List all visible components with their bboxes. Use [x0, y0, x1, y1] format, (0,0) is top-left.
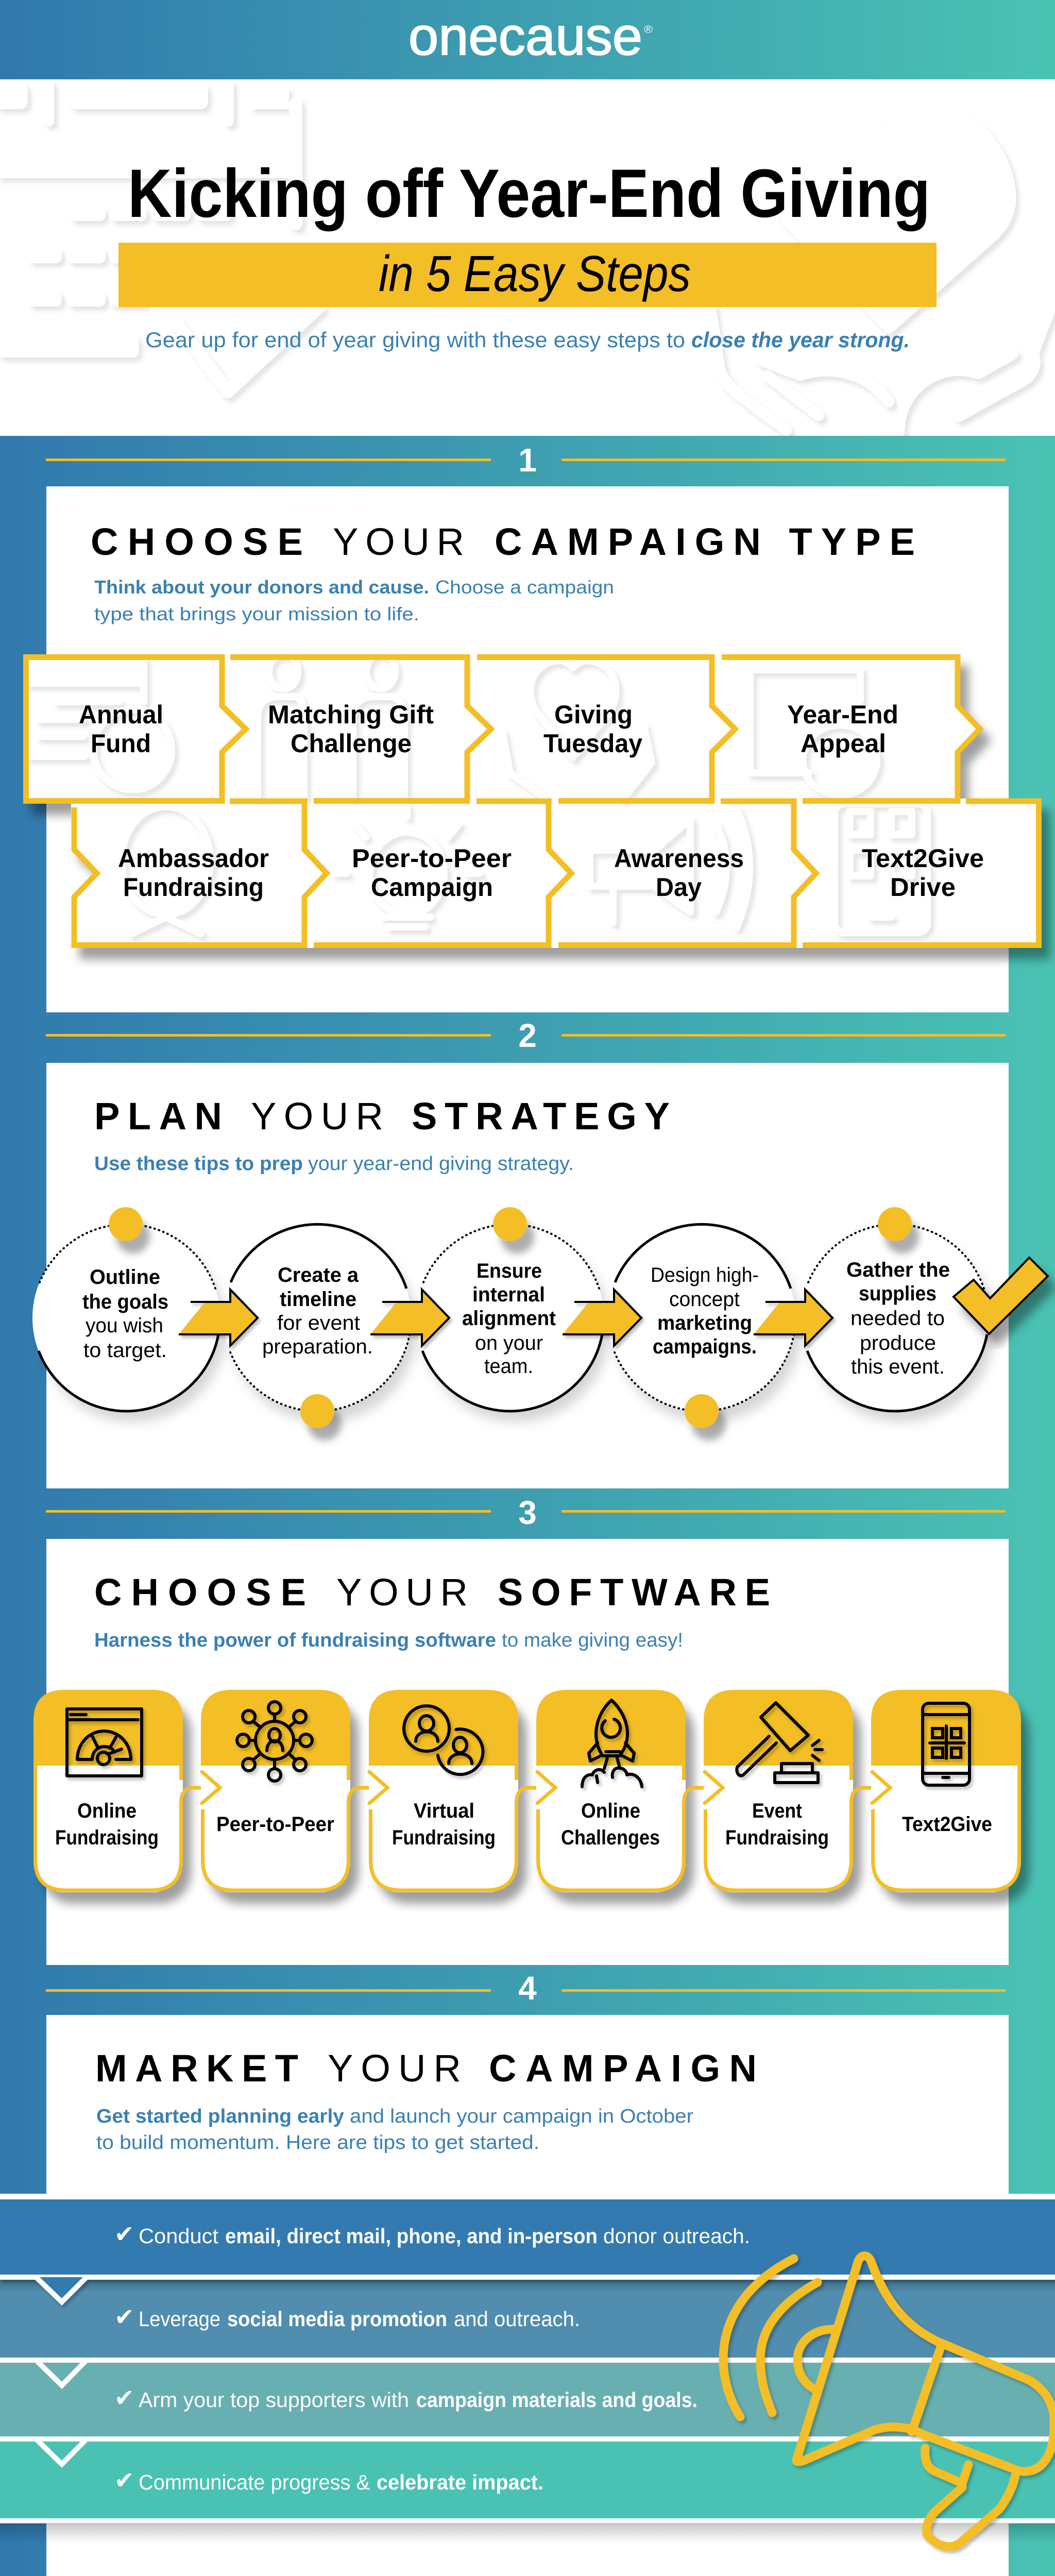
heading: market your campaign: YOUR: [328, 2047, 461, 2090]
band text 1: email, direct mail, phone, and in-person: [225, 2224, 598, 2248]
logo: onecause: ®: [644, 24, 653, 36]
card labels: Virtual: [414, 1800, 474, 1822]
strategy step text: timeline: [280, 1288, 356, 1311]
heading: choose your software: SOFTWARE: [498, 1571, 770, 1614]
band text 4: celebrate impact.: [377, 2470, 543, 2494]
icon: check mark: [954, 1258, 1048, 1334]
strategy step text: internal: [472, 1283, 545, 1306]
header band: [0, 0, 1055, 79]
strategy step text: the goals: [82, 1291, 168, 1313]
chevron labels: Awareness: [614, 844, 744, 873]
card labels: Peer-to-Peer: [216, 1813, 334, 1836]
strategy step text: Design high-: [651, 1264, 759, 1286]
card labels: Text2Give: [902, 1813, 992, 1836]
card: Virtual Fundraising: [369, 1690, 554, 1892]
band notch 2: [0, 2360, 1055, 2385]
intro text: [145, 328, 910, 352]
strategy step text: marketing: [657, 1312, 752, 1334]
hero watermark: heart in hands: [710, 115, 1055, 433]
band text 3: Arm your top supporters with: [139, 2388, 409, 2412]
chevron: Text2Give Drive: [803, 801, 1039, 945]
heading: choose your software: [94, 1571, 770, 1614]
section number 3: [46, 1494, 1006, 1531]
strategy step text: concept: [669, 1288, 740, 1311]
chevron labels: Matching Gift: [268, 700, 434, 729]
chevron: Ambassador Fundraising: [74, 801, 327, 945]
card labels: Challenges: [561, 1826, 660, 1849]
section number 2: [46, 1017, 1006, 1054]
chevrons: campaign types: [26, 657, 1039, 945]
band text 2: and outreach.: [454, 2307, 580, 2331]
heading: market your campaign: CAMPAIGN: [489, 2047, 757, 2090]
chevron watermarks: [29, 654, 927, 934]
card: Online Fundraising: [33, 1690, 219, 1892]
logo: onecause: onecause: [409, 7, 642, 66]
card labels: [55, 1800, 992, 1849]
chevron labels: Campaign: [371, 873, 493, 902]
icon: megaphone: [723, 2256, 1054, 2547]
intro: campaign type: type that brings your mission to life.: [94, 603, 419, 624]
chevron labels: Challenge: [291, 729, 412, 758]
card: Peer-to-Peer: [201, 1690, 386, 1892]
band text 3: ✔: [114, 2384, 134, 2412]
band notch 3: [0, 2439, 1055, 2464]
chevron labels: Drive: [890, 873, 956, 902]
chevron: Giving Tuesday: [477, 657, 735, 801]
chevron labels: [79, 700, 984, 902]
strategy step text: Gather the: [846, 1259, 950, 1281]
band text 3: [114, 2384, 697, 2412]
title: Kicking off Year-End Giving: [128, 156, 930, 232]
arrow 2: [370, 1290, 449, 1346]
chevron: Peer-to-Peer Campaign: [314, 801, 571, 945]
heading: choose your software: CHOOSE: [94, 1571, 306, 1614]
heading: plan your strategy: PLAN: [94, 1095, 222, 1138]
section number 4: 4: [518, 1970, 537, 2007]
band text 1: donor outreach.: [603, 2224, 750, 2248]
strategy step text: for event: [277, 1312, 360, 1334]
heading: choose your campaign type: [91, 520, 915, 563]
chevron: Awareness Day: [558, 801, 816, 945]
chevron labels: Fund: [91, 729, 151, 758]
section number 4: [46, 1970, 1006, 2007]
band text 2: [114, 2303, 580, 2331]
strategy step text: [82, 1259, 950, 1378]
band notch 1: [0, 2277, 1055, 2303]
band text 4: [114, 2466, 543, 2494]
intro: strategy: your year-end giving strategy.: [308, 1153, 574, 1175]
icon: gavel: [737, 1703, 822, 1783]
strategy circle outlines: [39, 1224, 987, 1411]
band text 2: social media promotion: [227, 2307, 447, 2331]
chevron labels: Giving: [554, 700, 633, 729]
chevron labels: Annual: [79, 700, 163, 729]
campaign type chevron backing: [23, 654, 1042, 948]
heading: choose your campaign type: CAMPAIGN TYPE: [495, 520, 915, 563]
strategy step text: Ensure: [477, 1260, 542, 1282]
card: Text2Give: [871, 1690, 1021, 1892]
intro: campaign type: [94, 577, 614, 624]
hero watermark: heart tip: [174, 304, 322, 392]
chevron labels: Tuesday: [543, 729, 642, 758]
icon: browser gauge: [67, 1709, 142, 1776]
title banner: in 5 Easy Steps: [379, 245, 691, 302]
intro: strategy: Use these tips to prep: [94, 1153, 303, 1175]
arrow 3: [563, 1290, 641, 1346]
strategy step text: to target.: [83, 1339, 167, 1362]
panel: choose campaign type: [46, 486, 1009, 1012]
icon: phone QR: [923, 1703, 969, 1785]
intro: campaign type: Think about your donors and cause.: [94, 577, 429, 598]
heading: market your campaign: [95, 2047, 757, 2090]
card labels: Fundraising: [55, 1826, 159, 1849]
intro: strategy: [94, 1153, 574, 1175]
card: Event Fundraising: [704, 1690, 889, 1892]
heading: choose your campaign type: YOUR: [333, 520, 464, 563]
chevron labels: Text2Give: [862, 844, 984, 873]
panel: choose your software: [46, 1539, 1009, 1965]
strategy step text: you wish: [86, 1314, 163, 1337]
strategy step text: Outline: [90, 1266, 160, 1289]
chevron: Matching Gift Challenge: [230, 657, 491, 801]
card: Online Challenges: [536, 1690, 722, 1892]
band text 1: ✔: [114, 2220, 134, 2248]
band text 3: campaign materials and goals.: [416, 2388, 697, 2412]
intro: marketing: to build momentum. Here are tips to get started.: [96, 2132, 539, 2154]
strategy step text: needed to: [850, 1307, 945, 1330]
chevron: Annual Fund: [26, 657, 246, 801]
band text 1: Conduct: [139, 2224, 219, 2248]
heading: choose your software: YOUR: [336, 1571, 468, 1614]
band text 1: [114, 2220, 750, 2248]
chevron labels: Appeal: [801, 729, 886, 758]
heading: plan your strategy: STRATEGY: [412, 1095, 670, 1138]
panel: plan your strategy: [46, 1063, 1009, 1488]
strategy step text: team.: [484, 1355, 533, 1378]
band text 4: Communicate progress &: [139, 2470, 370, 2494]
band text 4: ✔: [114, 2466, 134, 2494]
section number 2: 2: [518, 1017, 537, 1054]
strategy step text: this event.: [851, 1355, 945, 1378]
band text 2: ✔: [114, 2303, 134, 2331]
intro text: Gear up for end of year giving with these easy steps to: [145, 328, 685, 352]
strategy step text: supplies: [859, 1282, 937, 1305]
heading: plan your strategy: [94, 1095, 670, 1138]
icon: virtual people: [404, 1706, 483, 1774]
card connector arrows: [202, 1772, 890, 1803]
icon: network people: [237, 1702, 312, 1781]
arrow 1: [179, 1290, 258, 1346]
section number 3: 3: [518, 1494, 537, 1531]
card labels: Fundraising: [392, 1826, 496, 1849]
chevron labels: Peer-to-Peer: [352, 844, 512, 873]
marketing bands: [0, 2194, 1055, 2544]
intro: marketing: and launch your campaign in October: [350, 2106, 693, 2127]
arrow 4: [754, 1290, 832, 1346]
chevron: Year-End Appeal: [722, 657, 980, 801]
chevron labels: Fundraising: [123, 873, 264, 902]
icon: rocket: [582, 1700, 642, 1787]
strategy yellow dots: [109, 1207, 912, 1428]
band text 2: Leverage: [139, 2307, 220, 2331]
strategy step text: on your: [475, 1332, 543, 1354]
strategy circle backs: [32, 1224, 989, 1412]
strategy step text: Create a: [278, 1264, 359, 1286]
card labels: Online: [581, 1800, 640, 1822]
intro text: close the year strong.: [691, 328, 910, 352]
title banner: [118, 243, 937, 307]
panel: market your campaign: [46, 2015, 1009, 2576]
card labels: Online: [77, 1800, 137, 1822]
strategy step text: alignment: [462, 1307, 556, 1330]
chevron labels: Year-End: [787, 700, 898, 729]
heading: choose your campaign type: CHOOSE: [91, 520, 303, 563]
strategy step text: preparation.: [262, 1335, 373, 1358]
heading: market your campaign: MARKET: [95, 2047, 298, 2090]
section number 1: 1: [518, 442, 537, 479]
heading: plan your strategy: YOUR: [251, 1095, 383, 1138]
intro: marketing: Get started planning early: [96, 2106, 344, 2127]
card labels: Fundraising: [725, 1826, 829, 1849]
intro: campaign type: Choose a campaign: [435, 577, 614, 598]
card labels: Event: [752, 1800, 802, 1822]
hero watermark: calendar: [0, 79, 302, 358]
intro: software: [94, 1630, 683, 1651]
strategy step text: campaigns.: [653, 1335, 757, 1358]
intro: marketing: [96, 2106, 693, 2154]
chevron labels: Day: [656, 873, 702, 902]
section number 1: [46, 442, 1006, 479]
intro: software: to make giving easy!: [502, 1630, 683, 1651]
chevron labels: Ambassador: [118, 844, 269, 873]
intro: software: Harness the power of fundraising software: [94, 1630, 496, 1651]
strategy step text: produce: [860, 1332, 936, 1354]
